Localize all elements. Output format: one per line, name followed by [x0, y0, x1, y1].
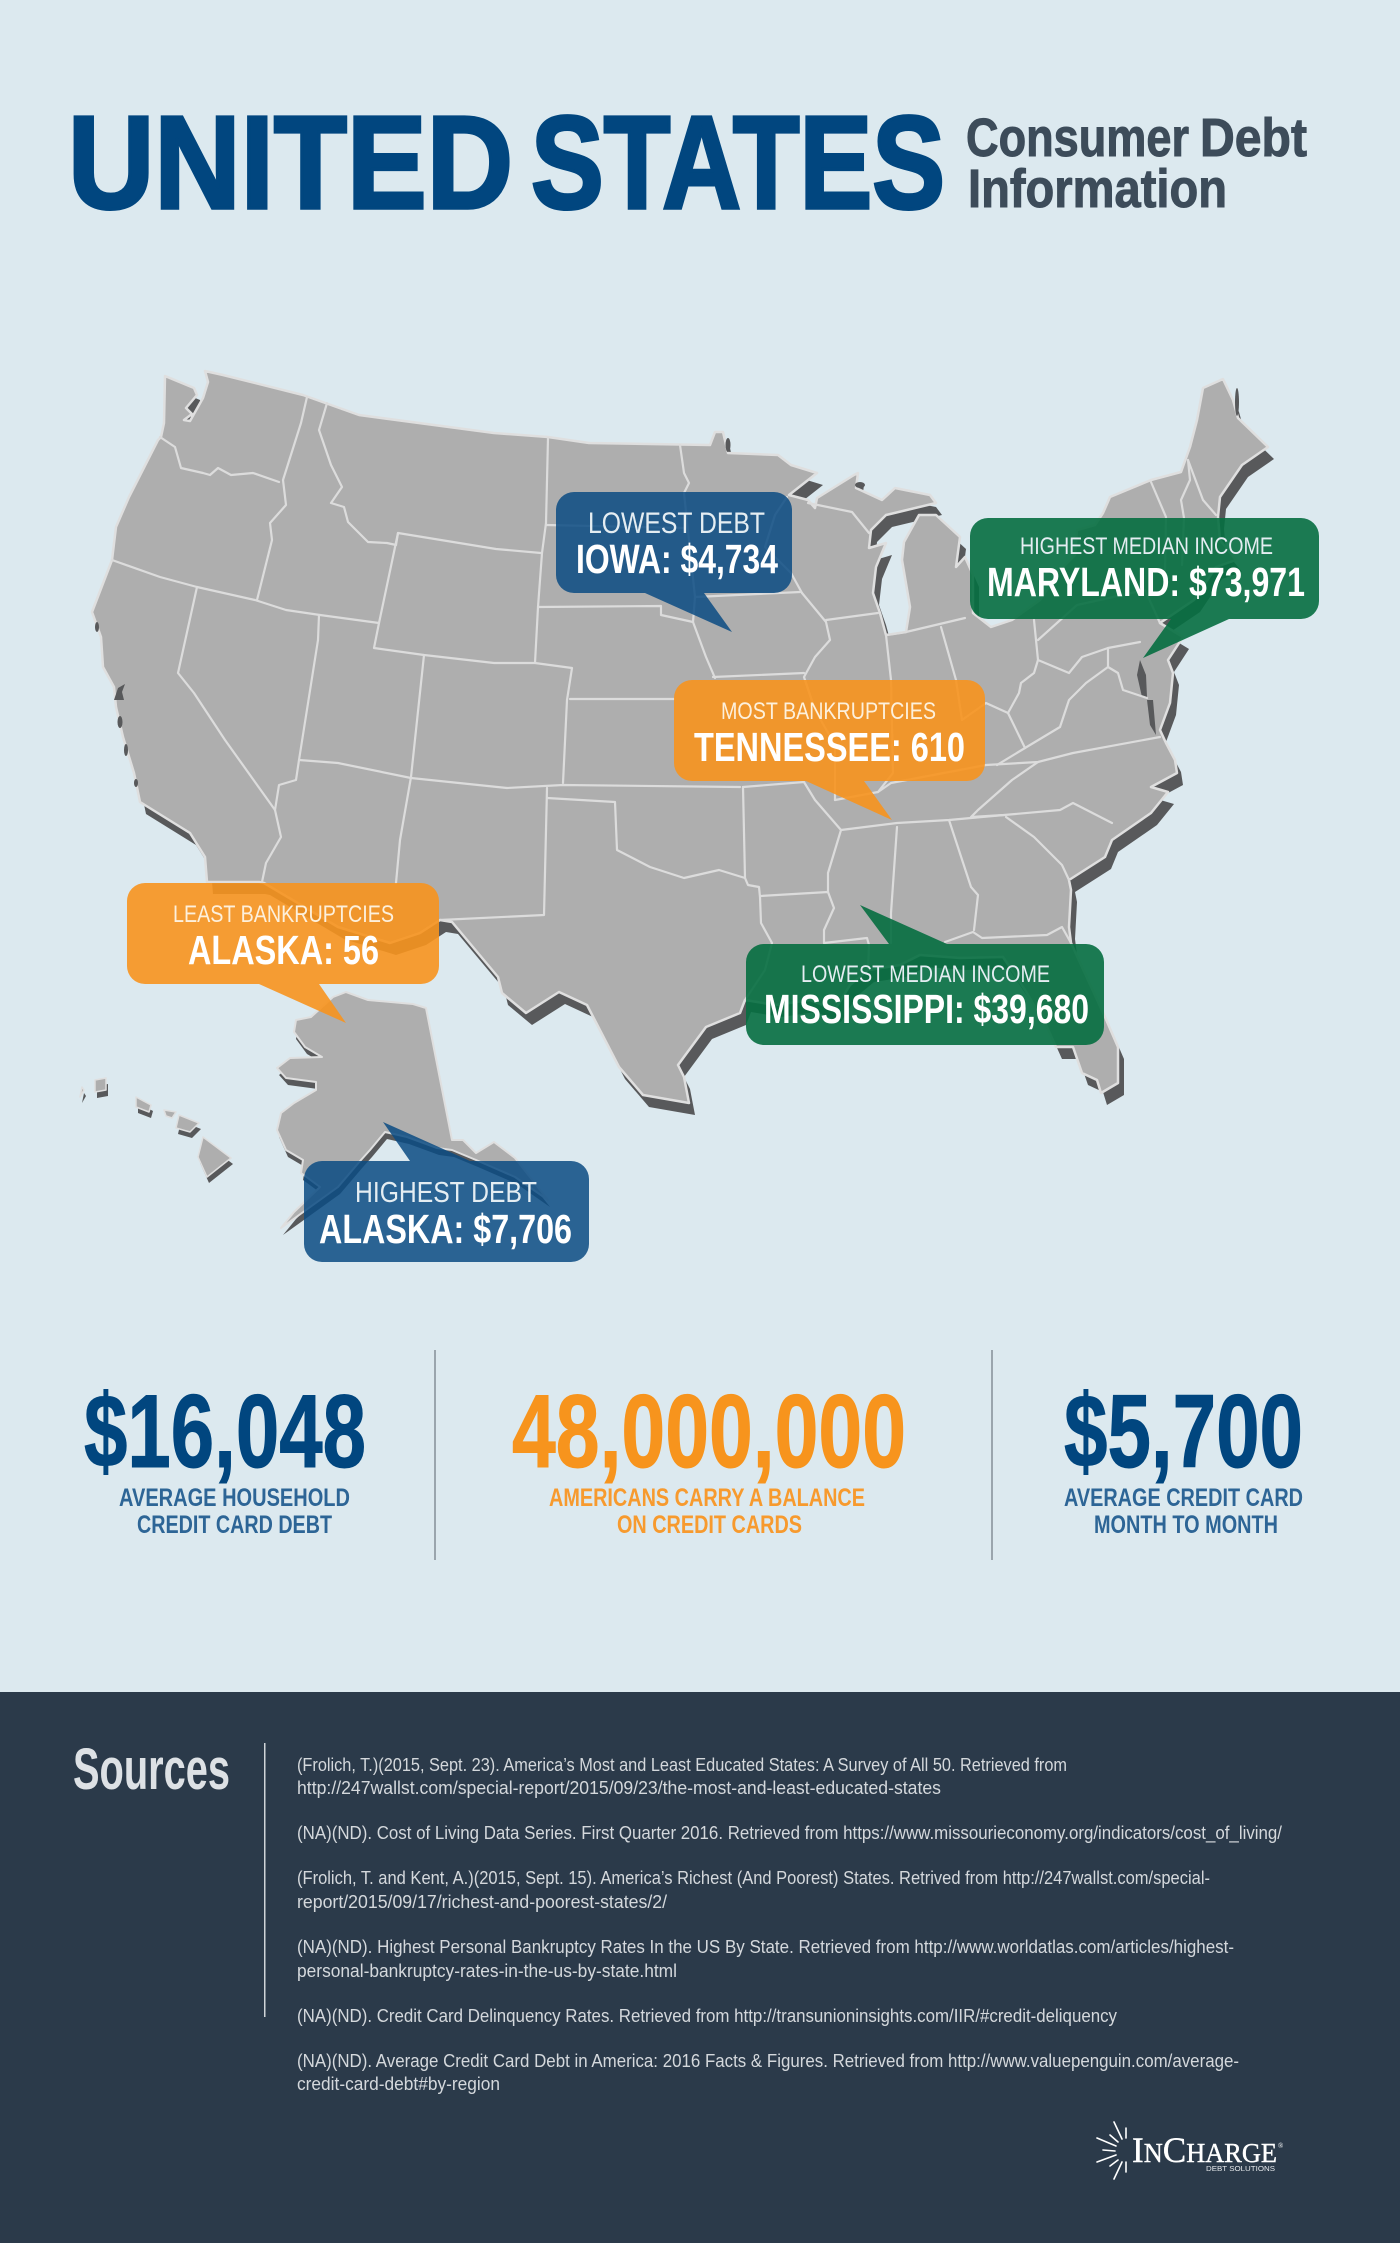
callout: lowest median income Mississippi: LOWEST MEDIAN INCOME [801, 961, 1050, 988]
source list: report/2015/09/17/richest-and-poorest-states/2/ [297, 1892, 667, 1912]
stat: Americans carrying a balance: AMERICANS CARRY A BALANCE [549, 1484, 865, 1512]
stat: average household credit card debt: CREDIT CARD DEBT [137, 1511, 332, 1539]
logo: InCharge Debt Solutions [1097, 2122, 1284, 2179]
title [68, 89, 1307, 236]
callout: most bankruptcies Tennessee: TENNESSEE: 610 [694, 724, 965, 770]
stat: Americans carrying a balance [512, 1374, 906, 1539]
callout: highest debt Alaska: ALASKA: $7,706 [319, 1206, 572, 1252]
callout: least bankruptcies Alaska: LEAST BANKRUPTCIES [173, 901, 394, 928]
stat: Americans carrying a balance: 48,000,000 [512, 1374, 906, 1490]
map land: contiguous states [92, 371, 1268, 1103]
source list: (NA)(ND). Highest Personal Bankruptcy Rates In the US By State. Retrieved from http://www.worldatlas.com/articles/highest- [297, 1937, 1234, 1957]
map: United States [80, 371, 1274, 1235]
map: Alaska [277, 992, 550, 1235]
logo: InCharge Debt Solutions: INCHARGE [1132, 2130, 1277, 2170]
state borders [112, 397, 1216, 1000]
map shadow: contiguous states [98, 383, 1274, 1115]
source list: personal-bankruptcy-rates-in-the-us-by-state.html [297, 1961, 677, 1981]
source list: (NA)(ND). Cost of Living Data Series. First Quarter 2016. Retrieved from https://www.missourieconomy.org/indicators/cost_of_living/ [297, 1823, 1282, 1844]
source list: (Frolich, T.)(2015, Sept. 23). America’s Most and Least Educated States: A Survey of All 50. Retrieved from [297, 1755, 1067, 1775]
callout: highest median income Maryland: HIGHEST MEDIAN INCOME [1020, 533, 1273, 560]
source list: http://247wallst.com/special-report/2015/09/23/the-most-and-least-educated-states [297, 1778, 941, 1798]
source list [297, 1755, 1282, 2094]
title: Consumer [966, 108, 1189, 168]
source list: credit-card-debt#by-region [297, 2074, 500, 2094]
stat: average household credit card debt: AVERAGE HOUSEHOLD [119, 1484, 350, 1512]
panel: sources footer [0, 1692, 1400, 2243]
title: UNITED [68, 89, 513, 236]
heading: sources: Sources [73, 1737, 230, 1802]
callout: lowest debt Iowa: IOWA: $4,734 [576, 536, 778, 582]
small bays and islands [95, 388, 1239, 787]
callout: least bankruptcies Alaska [127, 883, 439, 1023]
callout: lowest median income Mississippi: MISSISSIPPI: $39,680 [764, 986, 1089, 1032]
stat: average household credit card debt: $16,048 [84, 1374, 366, 1490]
callout: most bankruptcies Tennessee [674, 680, 985, 820]
callout: highest median income Maryland [970, 518, 1319, 658]
title: Information [968, 159, 1227, 219]
logo: InCharge Debt Solutions: DEBT SOLUTIONS [1206, 2164, 1275, 2173]
stat: average credit card month to month: $5,700 [1064, 1374, 1303, 1490]
callout: highest debt Alaska: HIGHEST DEBT [355, 1177, 537, 1209]
stat: average credit card month to month: AVERAGE CREDIT CARD [1064, 1484, 1303, 1512]
callout: lowest debt Iowa [556, 492, 792, 632]
stat: average credit card month to month: MONTH TO MONTH [1094, 1511, 1278, 1539]
callout: lowest debt Iowa: LOWEST DEBT [588, 507, 765, 540]
callout: most bankruptcies Tennessee: MOST BANKRUPTCIES [721, 698, 936, 725]
title: Debt [1200, 108, 1307, 168]
callout: lowest median income Mississippi [746, 905, 1104, 1045]
logo: InCharge Debt Solutions: ® [1278, 2142, 1284, 2150]
source list: (NA)(ND). Average Credit Card Debt in America: 2016 Facts & Figures. Retrieved from http://www.valuepenguin.com/average- [297, 2051, 1239, 2071]
callout: highest median income Maryland: MARYLAND: $73,971 [987, 559, 1305, 605]
stat: Americans carrying a balance: ON CREDIT CARDS [617, 1511, 802, 1539]
callout: highest debt Alaska [304, 1122, 589, 1262]
stat: average credit card month to month [1064, 1374, 1303, 1539]
callout: least bankruptcies Alaska: ALASKA: 56 [188, 927, 379, 973]
stat: average household credit card debt [84, 1374, 366, 1539]
title: STATES [531, 89, 945, 236]
source list: (Frolich, T. and Kent, A.)(2015, Sept. 15). America’s Richest (And Poorest) States. Retrived from http://247wallst.com/special- [297, 1868, 1210, 1888]
source list: (NA)(ND). Credit Card Delinquency Rates. Retrieved from http://transunioninsights.com/IIR/#credit-deliquency [297, 2006, 1117, 2026]
map: Hawaii [80, 1078, 233, 1183]
